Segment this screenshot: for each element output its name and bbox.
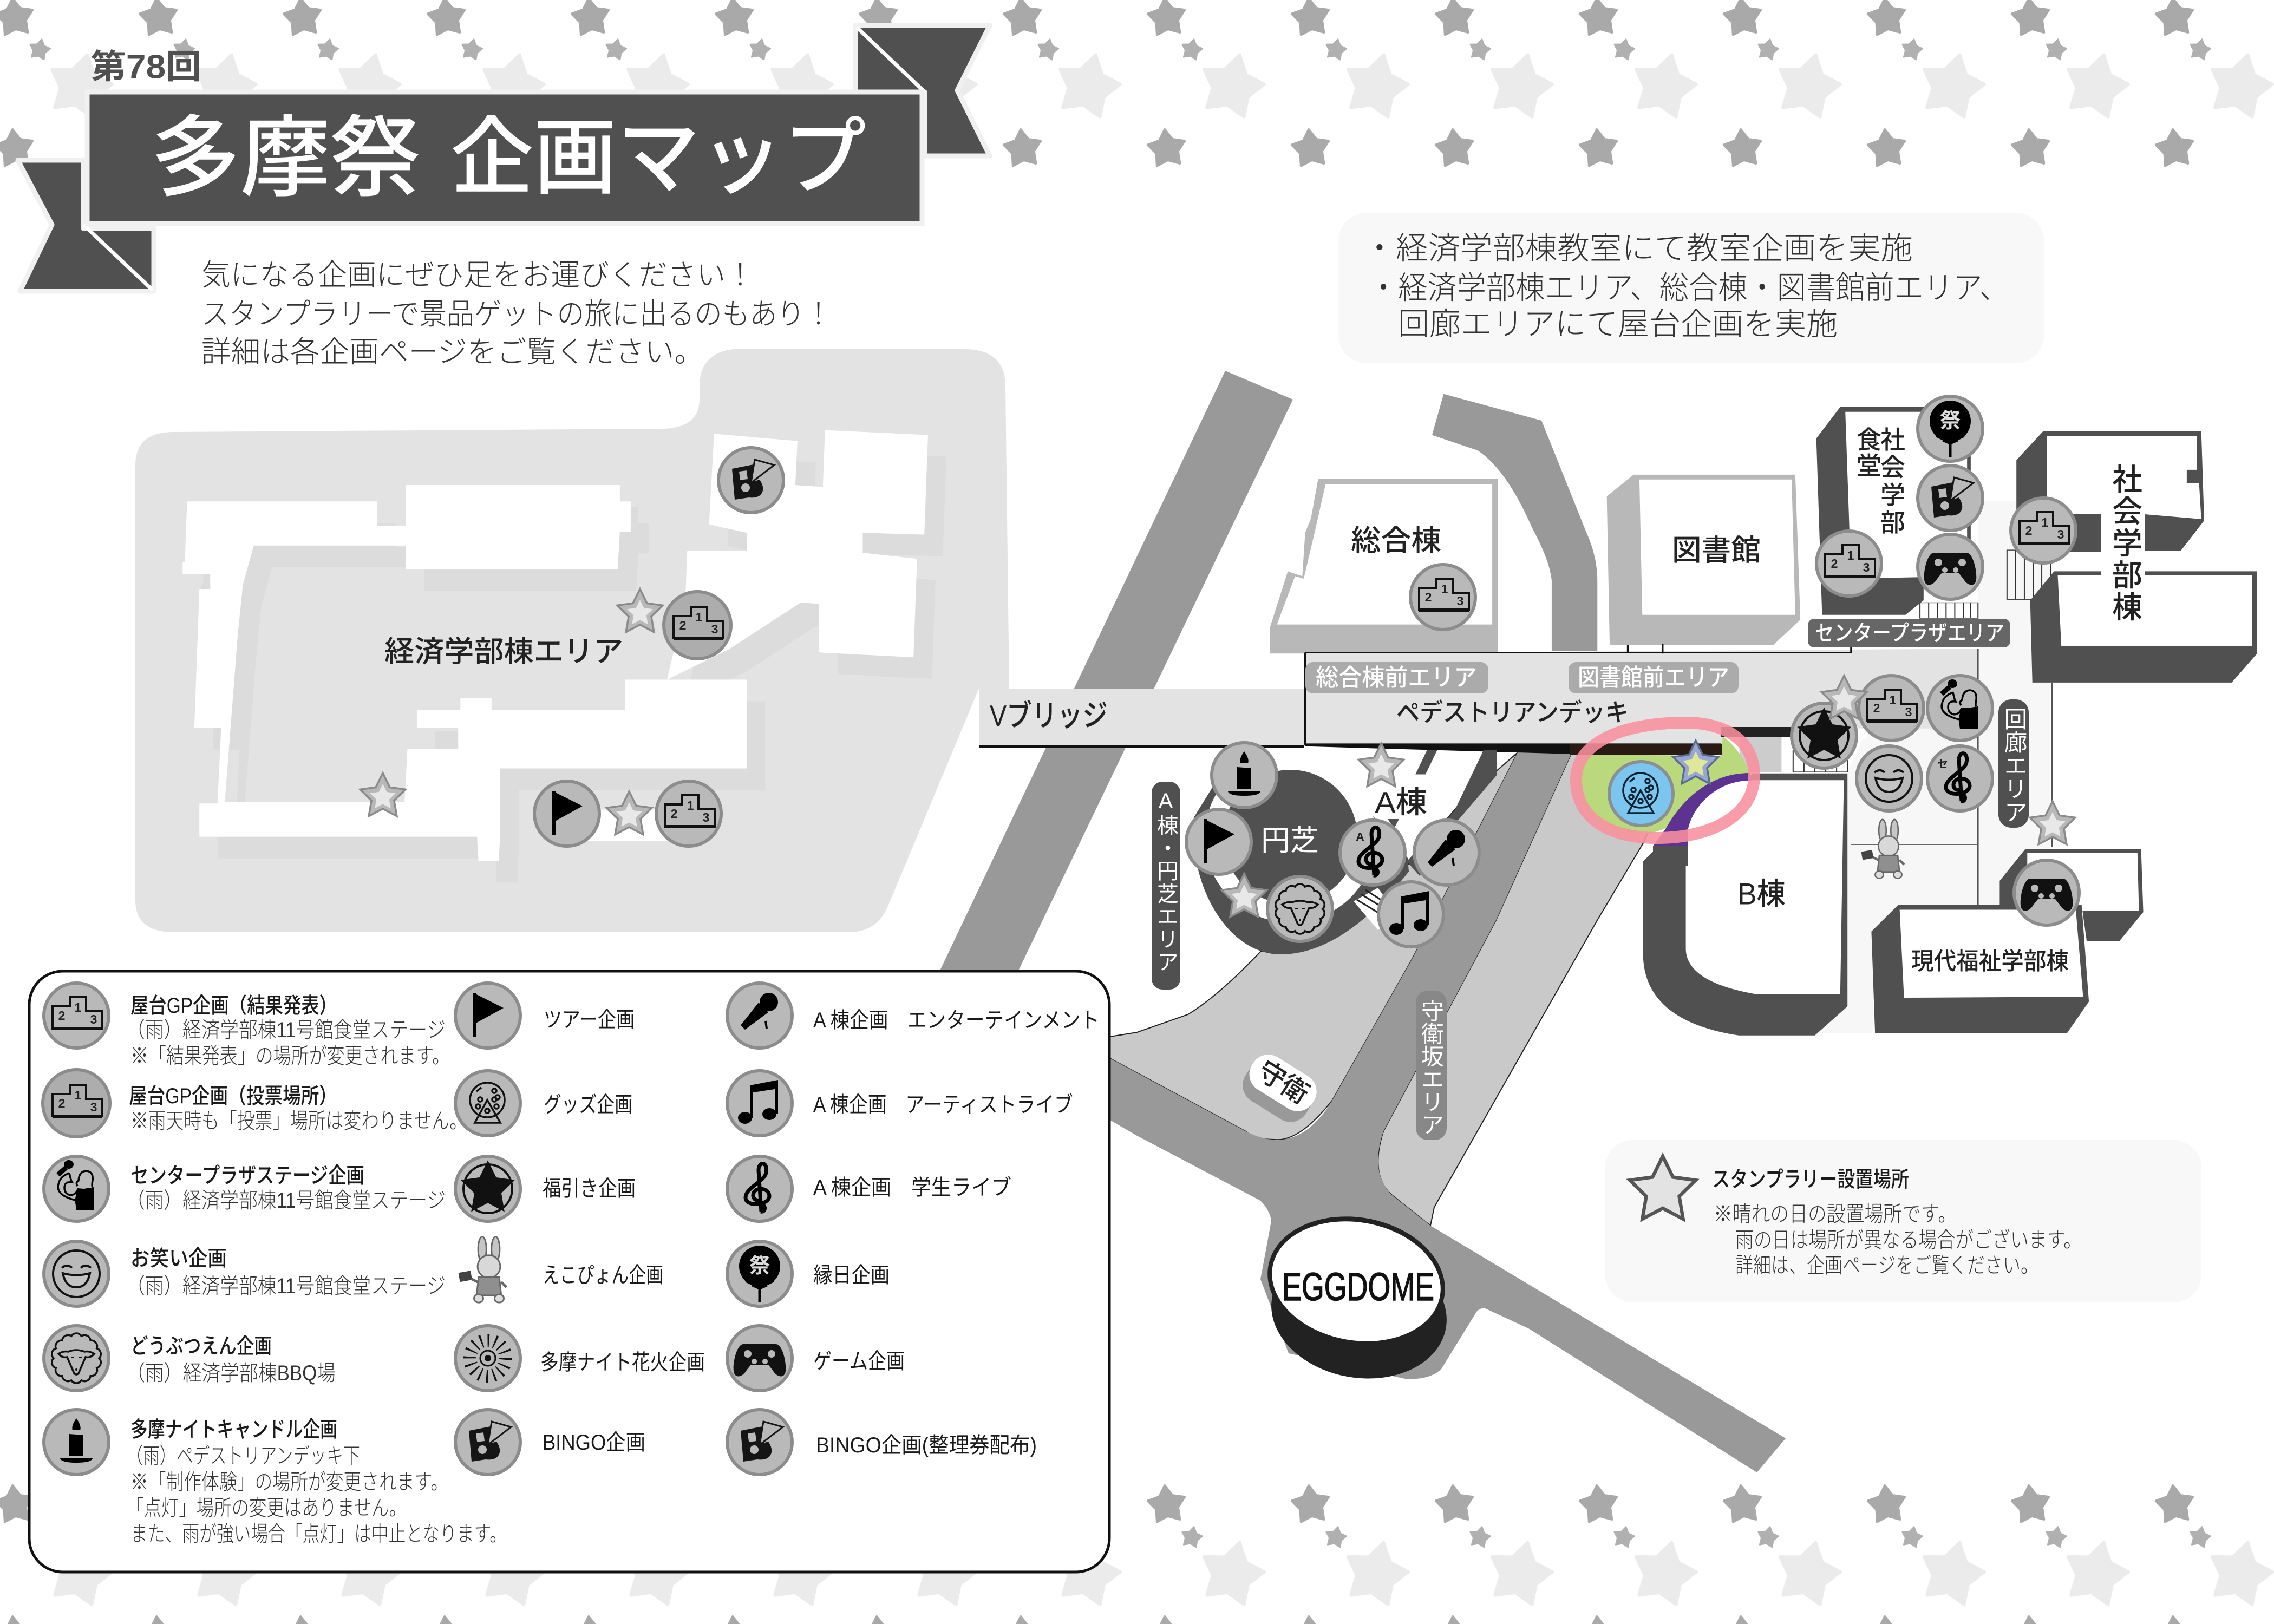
label: library: 図書館 <box>1672 534 1761 567</box>
legend: mascot <box>459 1237 663 1302</box>
legend: bingo tickets <box>727 1410 1037 1475</box>
ribbon: right tail <box>855 25 990 156</box>
highlight: green lawn area <box>1570 723 1787 866</box>
panel: stamp rally note: 雨の日は場所が異なる場合がございます。 <box>1735 1228 2082 1252</box>
title: project map: 企画マップ <box>450 111 866 205</box>
label: social faculty wing: 社会学部棟 <box>2108 463 2142 623</box>
label: B wing: B棟 <box>1737 877 1786 911</box>
legend: tour <box>455 983 635 1048</box>
stairs: Enshiba <box>1354 888 1397 930</box>
legend: comedy: （雨）経済学部棟11号館食堂ステージ <box>126 1274 446 1298</box>
Shuei guard box <box>1236 1048 1323 1129</box>
edition label: 第78回 <box>90 49 201 86</box>
EGGDOME <box>1257 1203 1457 1392</box>
building: welfare faculty <box>1871 849 2144 1033</box>
legend: A wing entertainment <box>727 983 1100 1048</box>
star background top <box>0 0 2274 167</box>
legend: mascot: えこぴょん企画 <box>543 1263 663 1287</box>
legend: A wing artist live <box>727 1071 1073 1136</box>
panel: event info note: ・経済学部棟エリア、総合棟・図書館前エリア、 <box>1369 271 2009 305</box>
map icons and stamp stars: セ <box>1937 758 1948 770</box>
label: corridor area: 回廊エリア <box>2001 707 2027 823</box>
road: curved road <box>1432 394 1597 651</box>
building: Sogo <box>1270 479 1498 653</box>
title: festival name: 多摩祭 <box>151 108 420 208</box>
legend: A wing student live: A 棟企画 学生ライブ <box>813 1176 1011 1200</box>
legend: comedy <box>44 1241 446 1306</box>
label: cafeteria: 食堂 <box>1853 427 1881 479</box>
legend: lottery: 福引き企画 <box>543 1177 636 1201</box>
building: A wing stripes <box>1407 750 1497 876</box>
building: social faculty wing <box>2016 431 2257 683</box>
legend: candle night: 「点灯」場所の変更はありません。 <box>126 1496 407 1520</box>
label: welfare faculty: 現代福祉学部棟 <box>1911 948 2069 974</box>
panel: stamp rally note: ※晴れの日の設置場所です。 <box>1714 1202 1957 1226</box>
road: diagonal road <box>939 371 1293 972</box>
panel: economics faculty area map <box>135 349 1009 932</box>
icon: highlighted stamp star <box>1673 741 1718 784</box>
legend: A wing entertainment: A 棟企画 エンターテインメント <box>813 1009 1100 1032</box>
legend: bingo: BINGO企画 <box>543 1431 645 1455</box>
V bridge <box>979 689 1309 748</box>
legend: fair <box>727 1241 890 1306</box>
panel: stamp rally note <box>1605 1140 2201 1302</box>
legend: center plaza stage <box>44 1156 446 1221</box>
panel: event info note: ・経済学部棟教室にて教室企画を実施 <box>1363 231 1913 266</box>
Shuei guard box: 守衛 <box>1252 1055 1314 1110</box>
label: economics area: 経済学部棟エリア <box>384 636 623 668</box>
label: Sogo front area: 総合棟前エリア <box>1316 665 1477 691</box>
legend: goods: グッズ企画 <box>544 1093 632 1117</box>
building: B wing <box>1643 774 1847 1036</box>
legend: candle night: ※「制作体験」の場所が変更されます。 <box>130 1470 448 1494</box>
legend: bingo <box>455 1410 645 1475</box>
ribbon: main band <box>87 92 922 224</box>
legend: zoo: （雨）経済学部棟BBQ場 <box>126 1361 336 1385</box>
building: social faculty and cafeteria <box>1816 407 1971 615</box>
icon: stamp star <box>1630 1156 1696 1219</box>
legend: podium result: 屋台GP企画（結果発表） <box>130 994 337 1018</box>
legend: fireworks <box>455 1326 705 1391</box>
legend: fair: 縁日企画 <box>813 1263 890 1287</box>
legend: comedy: お笑い企画 <box>130 1247 227 1271</box>
panel: stamp rally note: 詳細は、企画ページをご覧ください。 <box>1735 1254 2038 1278</box>
building: Enshiba <box>1193 751 1409 954</box>
legend: zoo <box>44 1326 336 1391</box>
legend: goods <box>455 1071 632 1136</box>
legend: bingo tickets: BINGO企画(整理券配布) <box>816 1433 1037 1457</box>
intro text: 気になる企画にぜひ足をお運びください！ <box>201 258 755 292</box>
legend: podium result: ※「結果発表」の場所が変更されます。 <box>130 1044 450 1068</box>
panel: stamp rally note: スタンプラリー設置場所 <box>1712 1168 1909 1191</box>
label: Enshiba: 円芝 <box>1261 824 1319 857</box>
legend: game: ゲーム企画 <box>813 1350 905 1373</box>
map icons and stamp stars <box>360 396 2079 947</box>
legend: podium vote: 屋台GP企画（投票場所） <box>129 1084 337 1108</box>
label: center plaza area: センタープラザエリア <box>1815 621 2004 645</box>
star background bottom <box>0 1484 2274 1624</box>
legend: tour: ツアー企画 <box>544 1008 635 1032</box>
legend: podium vote <box>43 1070 467 1137</box>
panel: event info note: 回廊エリアにて屋台企画を実施 <box>1398 306 1838 342</box>
legend: A wing student live <box>727 1156 1011 1221</box>
label: social faculty: 社会学部 <box>1877 427 1905 537</box>
campus buildings <box>1270 394 2257 1036</box>
legend: center plaza stage: （雨）経済学部棟11号館食堂ステージ <box>126 1189 446 1213</box>
area labels <box>1152 427 2142 1140</box>
stairs <box>1793 550 2050 772</box>
legend: candle night: 多摩ナイトキャンドル企画 <box>130 1418 337 1442</box>
campus ground and roads <box>1110 752 1786 1472</box>
legend: zoo: どうぶつえん企画 <box>130 1334 272 1358</box>
intro text: スタンプラリーで景品ゲットの旅に出るのもあり！ <box>201 297 832 331</box>
legend: candle night: また、雨が強い場合「点灯」は中止となります。 <box>130 1522 507 1546</box>
deck <box>1305 620 2052 905</box>
map icons and stamp stars: A <box>1356 830 1364 843</box>
ribbon: left tail <box>18 160 154 291</box>
label: A wing: A棟 <box>1375 785 1427 820</box>
panel: legend <box>29 971 1109 1572</box>
building: library <box>1607 475 1800 645</box>
icon: highlighted goods capsule <box>1609 762 1673 826</box>
legend: podium result: （雨）経済学部棟11号館食堂ステージ <box>126 1018 446 1042</box>
label: pedestrian deck: ペデストリアンデッキ <box>1396 698 1629 726</box>
legend: A wing artist live: A 棟企画 アーティストライブ <box>813 1093 1073 1117</box>
legend: fireworks: 多摩ナイト花火企画 <box>540 1351 705 1374</box>
V bridge: Vブリッジ <box>990 698 1108 733</box>
intro text: 詳細は各企画ページをご覧ください。 <box>201 335 704 369</box>
legend: candle night: （雨）ペデストリアンデッキ下 <box>126 1444 360 1468</box>
label: library front area: 図書館前エリア <box>1578 665 1729 691</box>
plaza <box>1819 501 2050 1033</box>
intro text <box>201 258 832 369</box>
legend: podium result <box>44 983 450 1068</box>
legend: podium vote: ※雨天時も「投票」場所は変わりません。 <box>130 1109 467 1133</box>
legend: center plaza stage: センタープラザステージ企画 <box>130 1164 364 1188</box>
label: Shueizaka area: 守衛坂エリア <box>1419 999 1443 1136</box>
label: A wing Enshiba area: A棟・円芝エリア <box>1154 789 1178 973</box>
legend: game <box>727 1326 905 1391</box>
EGGDOME: EGGDOME <box>1282 1266 1434 1309</box>
label: Sogo building: 総合棟 <box>1351 525 1441 557</box>
legend: candle night <box>44 1410 507 1546</box>
legend: lottery <box>455 1156 636 1221</box>
panel: event info note <box>1338 213 2044 363</box>
title banner <box>18 25 990 291</box>
